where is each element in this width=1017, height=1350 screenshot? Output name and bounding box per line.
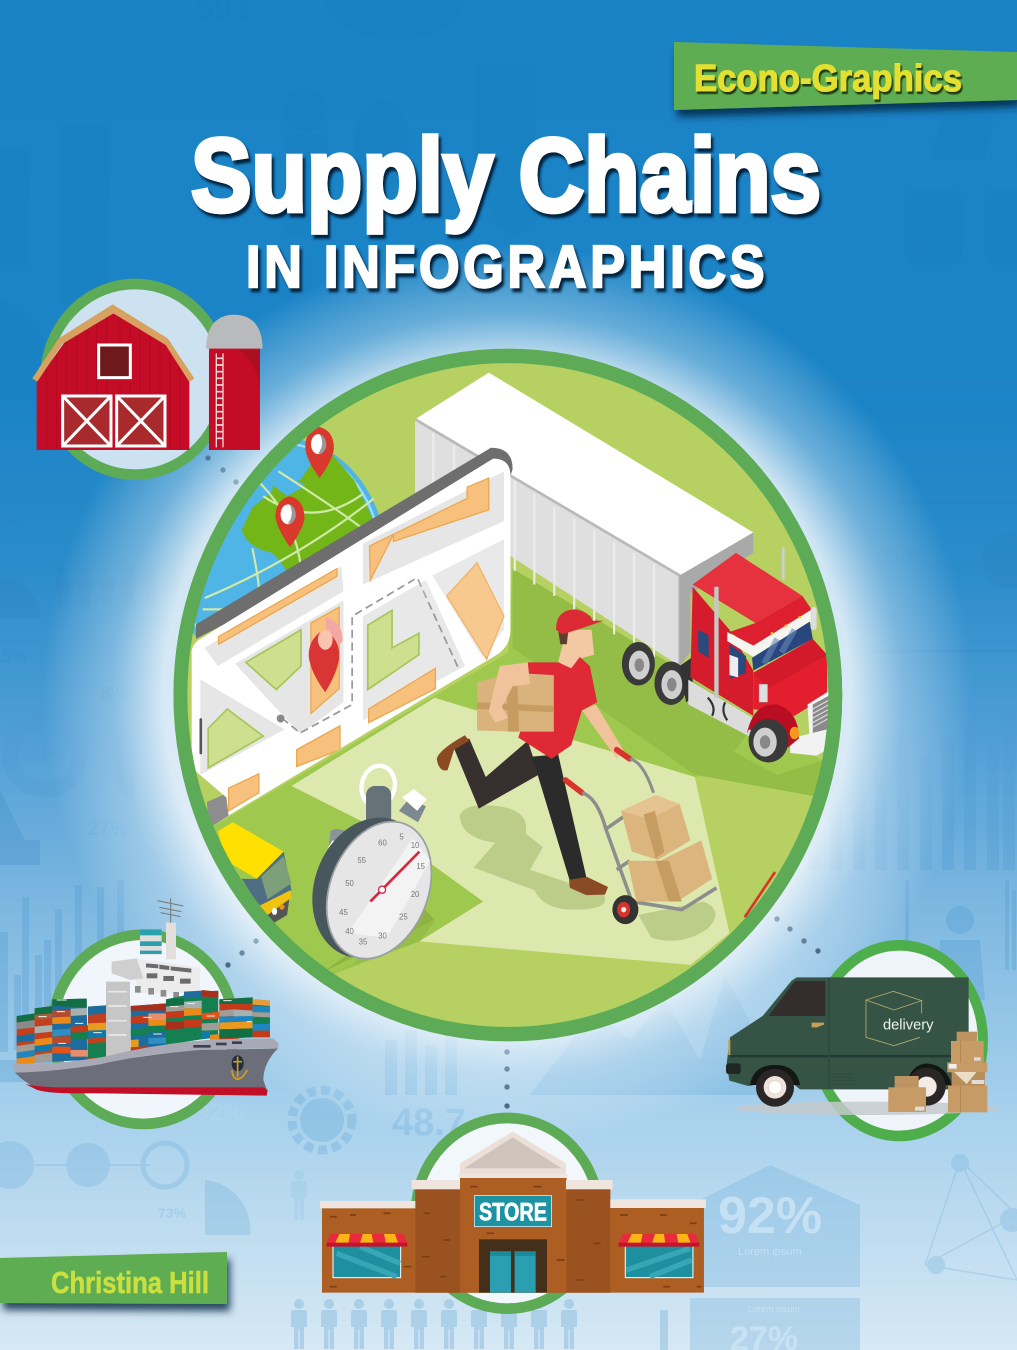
delivery van: delivery — [883, 1017, 934, 1033]
faint background infographic pictograms: 92% — [718, 1187, 822, 1245]
barn circle — [32, 279, 263, 480]
main illustration circle — [170, 340, 850, 1050]
hand truck with boxes — [566, 750, 716, 924]
faint background infographic pictograms: 30% — [24, 743, 66, 766]
back leg — [453, 738, 539, 809]
stopwatch: 60 — [378, 838, 387, 847]
ship superstructure — [106, 898, 200, 1057]
stopwatch: 25 — [399, 912, 408, 922]
banner: series name — [674, 42, 1017, 110]
faint background infographic pictograms: $400 — [898, 477, 936, 496]
containers — [17, 990, 270, 1064]
store building — [320, 1132, 706, 1293]
faint background infographic pictograms: 48.7 — [392, 1102, 466, 1144]
right arm — [582, 705, 623, 759]
right window — [619, 1234, 699, 1278]
stopwatch: 55 — [357, 856, 367, 865]
banner: series name: Econo-Graphics — [694, 58, 962, 100]
connector dots — [205, 455, 821, 1109]
stopwatch: 10 — [411, 841, 420, 850]
faint background infographic pictograms: $100 — [882, 547, 920, 566]
man shadow — [460, 805, 605, 910]
parcel boxes — [888, 1032, 987, 1112]
main circle ring — [180, 356, 835, 1034]
title: IN INFOGRAPHICS — [246, 234, 767, 300]
van circle — [726, 940, 998, 1141]
white glow behind main circle — [42, 245, 972, 1145]
barn body — [32, 304, 194, 450]
ship circle — [13, 898, 278, 1129]
truck trailer — [415, 373, 753, 666]
delivery man — [437, 609, 623, 895]
shirt — [518, 657, 597, 759]
ground band — [214, 574, 822, 974]
red vehicle edge — [745, 872, 775, 917]
light beam — [291, 698, 729, 965]
stopwatch — [291, 762, 451, 978]
stopwatch: 45 — [339, 908, 348, 917]
ground shadow — [735, 1102, 998, 1115]
ship hull — [13, 1038, 278, 1096]
truck cab — [688, 547, 829, 762]
title — [191, 118, 821, 300]
stopwatch: 30 — [378, 931, 387, 941]
banner: author: Christina Hill — [51, 1265, 209, 1300]
store door — [479, 1239, 547, 1293]
box carried — [477, 673, 554, 732]
stopwatch: 20 — [411, 890, 420, 899]
stopwatch: 35 — [359, 937, 368, 947]
store circle — [320, 1113, 706, 1314]
faint background infographic pictograms: 27% — [88, 818, 128, 840]
stopwatch: 15 — [416, 862, 426, 871]
stopwatch: 5 — [399, 832, 404, 841]
faint background infographic pictograms: 8% — [100, 683, 129, 705]
yellow vehicle — [218, 822, 291, 923]
faint background infographic pictograms: 92% — [196, 1099, 244, 1126]
smartphone with map — [192, 448, 513, 828]
truck wheels — [622, 642, 693, 705]
front leg — [532, 754, 587, 881]
faint background infographic pictograms: 73% — [158, 1205, 187, 1221]
map pin on phone — [309, 617, 343, 692]
faint background infographic pictograms: Lorem ipsum — [738, 1246, 802, 1258]
hat and head — [558, 630, 594, 671]
stopwatch: 40 — [345, 927, 354, 936]
left window — [327, 1234, 407, 1278]
delivery van — [726, 977, 969, 1107]
faint background infographic pictograms: OPTION 2 — [912, 242, 963, 254]
title: Supply Chains — [191, 118, 821, 234]
stopwatch: 50 — [345, 879, 354, 888]
banner: author — [0, 1252, 227, 1304]
globe — [193, 427, 379, 638]
faint background infographic pictograms: Lorem ipsum — [748, 1304, 800, 1314]
left arm — [489, 662, 530, 723]
map pins on globe — [305, 427, 334, 478]
faint background infographic pictograms: 5% — [2, 647, 27, 666]
store sign: STORE — [479, 1200, 547, 1227]
silo — [206, 315, 263, 450]
faint background infographic pictograms: 5% — [2, 512, 27, 531]
